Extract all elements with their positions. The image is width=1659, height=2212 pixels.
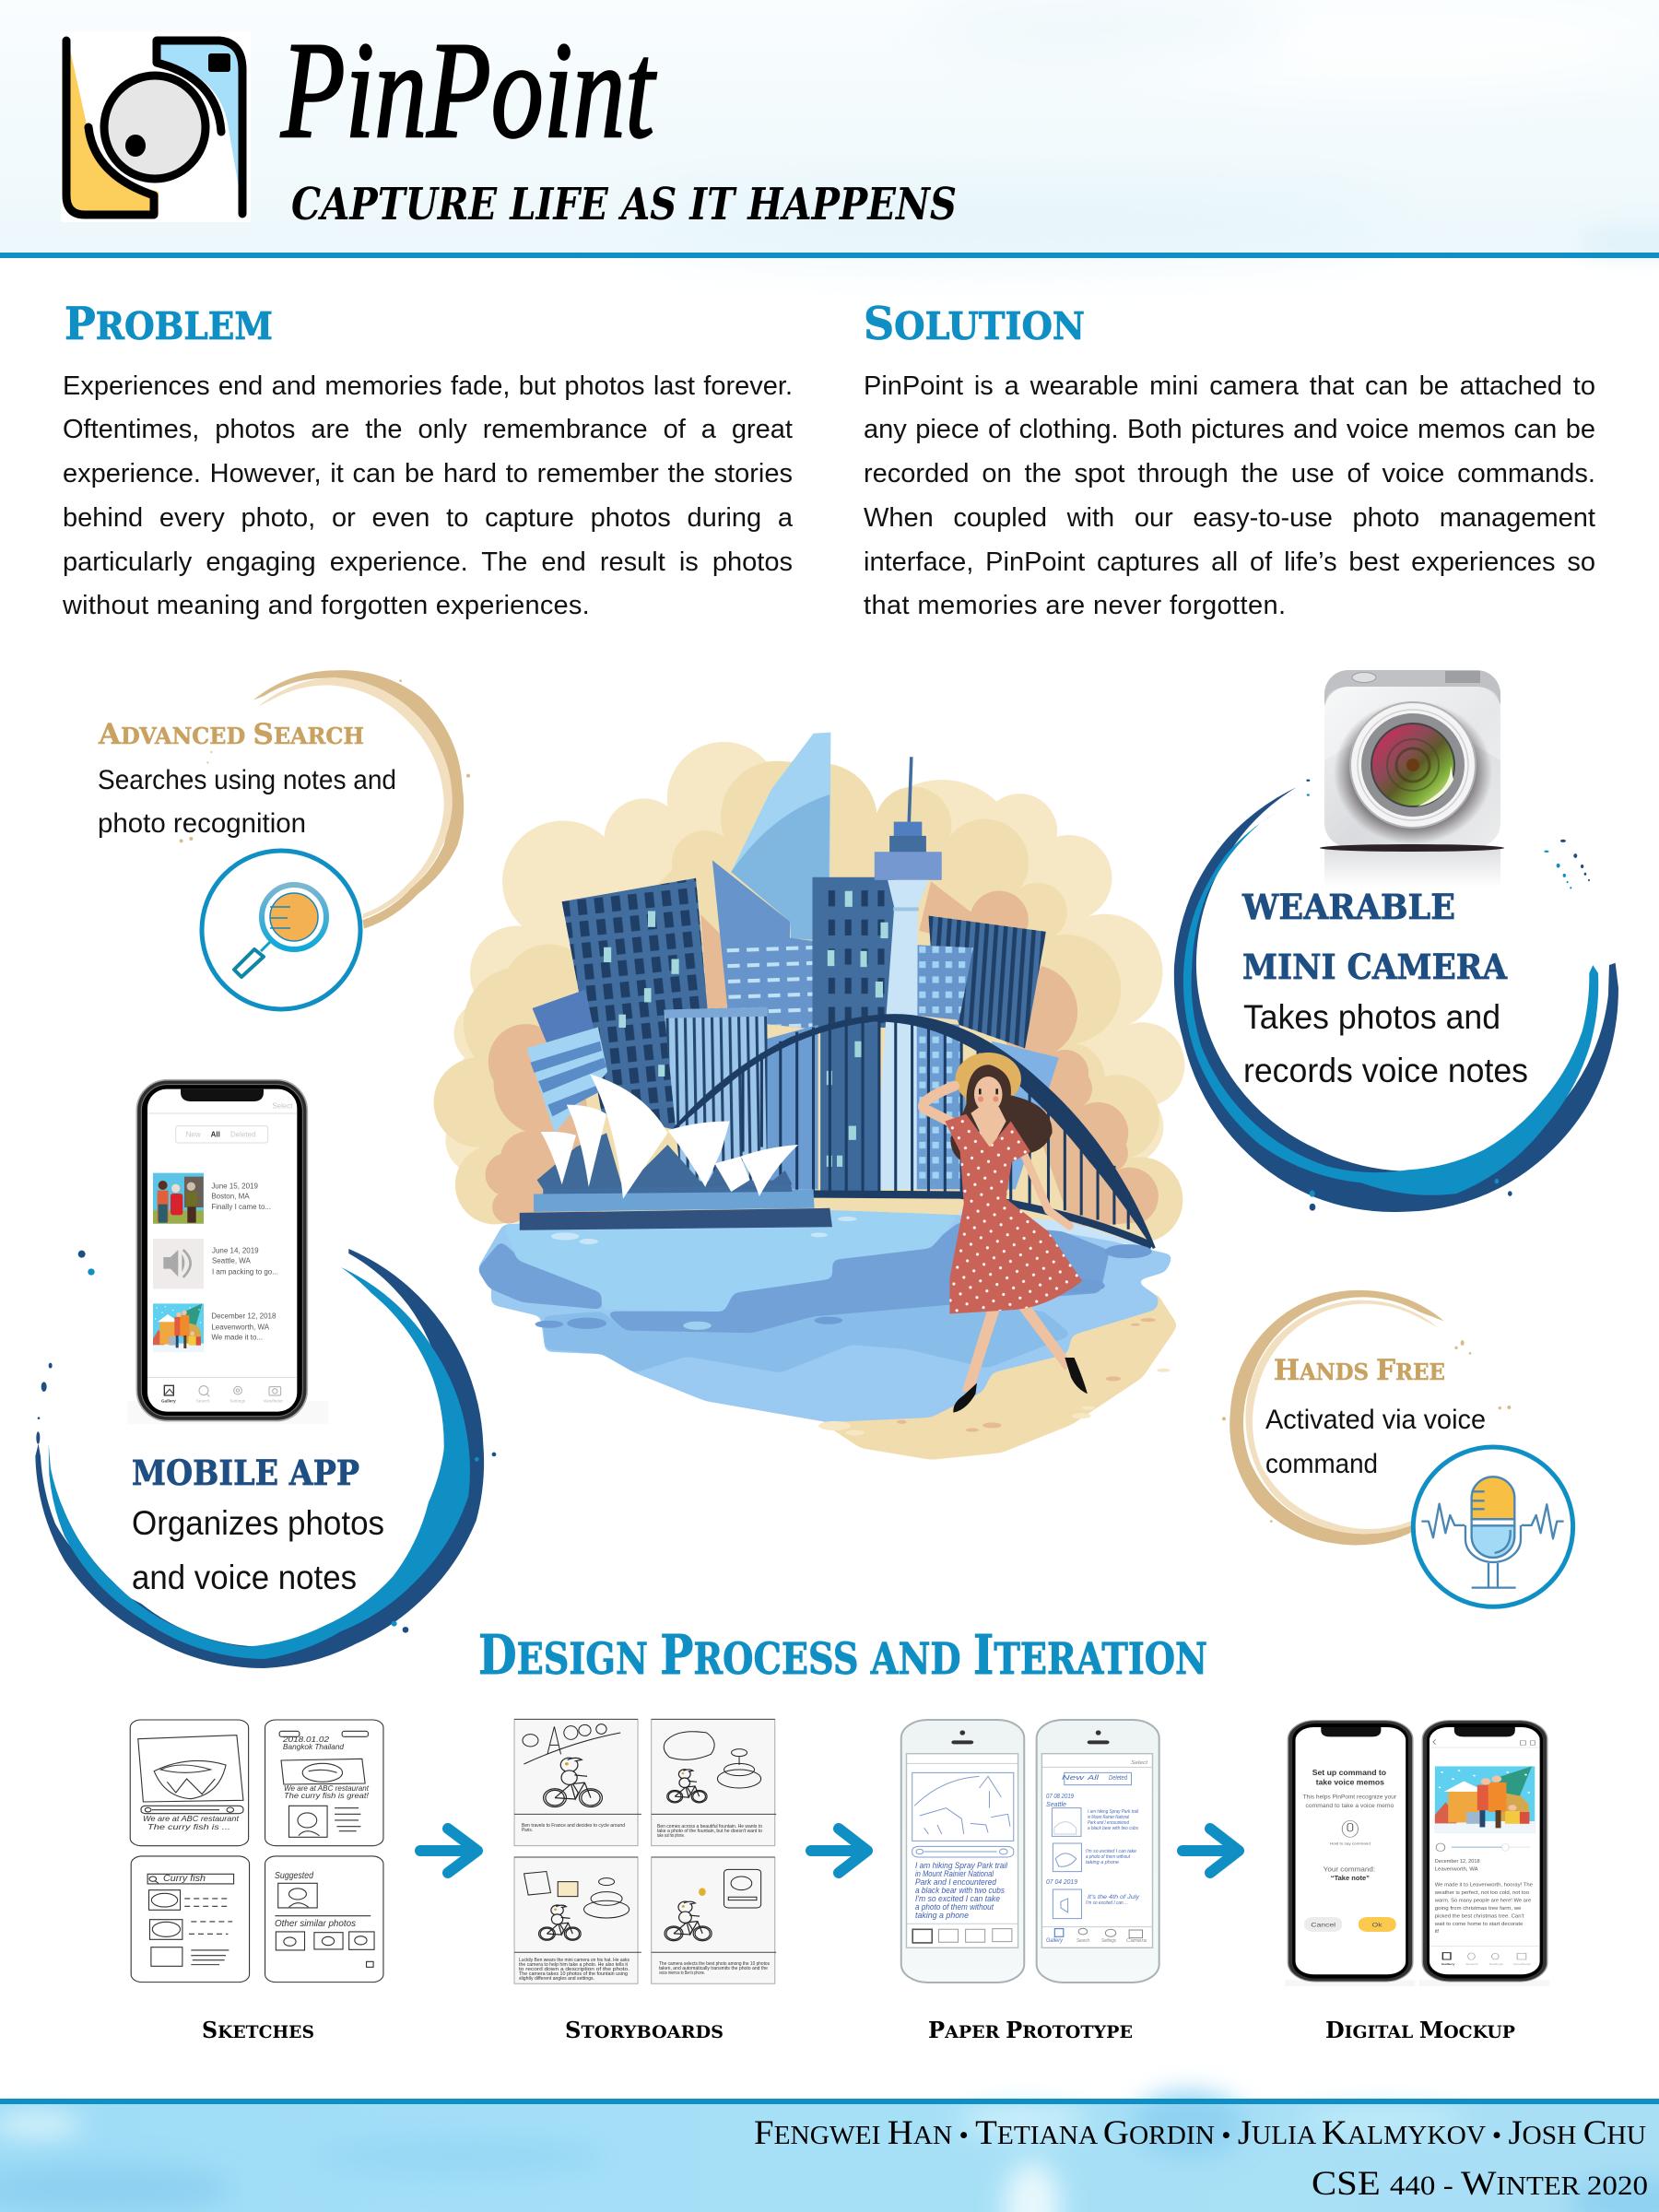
phones: Ok	[1372, 1922, 1382, 1928]
arrow	[1182, 1829, 1239, 1873]
arrow	[811, 1829, 867, 1873]
handwritten notes: Other similar photos	[275, 1919, 356, 1929]
set up command screen	[1303, 1770, 1397, 1882]
thumbnail: family photo	[153, 1173, 204, 1224]
woman in red dress	[924, 1053, 1088, 1413]
handwritten notes: Settings	[1101, 1938, 1116, 1944]
text block: problem description: particularly engaging experience. The end result is photos	[63, 547, 793, 577]
phone: gallery screen	[127, 1080, 329, 1424]
phones: December 12, 2018	[1435, 1859, 1480, 1865]
tower	[875, 757, 942, 1189]
phone: gallery screen: Search	[196, 1399, 210, 1404]
scene details	[523, 1724, 761, 1918]
header background	[0, 0, 1659, 258]
text block: problem description	[63, 371, 793, 620]
captions: Ben travels to France and decides to cycle around	[522, 1823, 625, 1829]
description	[1265, 1405, 1486, 1479]
label: DIGITAL MOCKUP	[1325, 2017, 1515, 2043]
captions: slightly different angles and settings.	[519, 1976, 594, 1982]
phones: Settings	[1489, 1963, 1503, 1966]
bridge	[675, 1016, 1154, 1248]
description: records voice notes	[1243, 1052, 1528, 1089]
paper phones	[901, 1720, 1159, 1983]
captions: Paris.	[522, 1828, 533, 1833]
handwritten notes: a black bear with two cubs	[915, 1886, 1005, 1896]
handwritten notes: The curry fish is great!	[284, 1791, 370, 1800]
arrow	[420, 1829, 477, 1873]
handwritten notes: 2018.01.02	[282, 1735, 329, 1744]
text block: solution description	[864, 371, 1595, 620]
sketch panels	[130, 1720, 383, 1983]
heading: MOBILE APP	[132, 1453, 359, 1493]
phones: going from christmas tree farm, we	[1435, 1906, 1522, 1912]
set up command screen: take voice memos	[1316, 1779, 1384, 1787]
phones: Viewfinder	[1512, 1963, 1532, 1966]
text block: problem description: Experiences end and memories fade, but photos last forever.	[63, 371, 793, 400]
set up command screen: Your command:	[1324, 1865, 1375, 1873]
description: command	[1265, 1449, 1378, 1479]
handwritten notes: in Mount Rainier National	[1088, 1815, 1130, 1820]
handwritten notes: in Mount Rainier National	[915, 1869, 994, 1879]
phones	[1285, 1721, 1549, 1986]
handwritten notes: I'm so excited I can take	[1086, 1849, 1136, 1854]
process step: Digital Mockup	[1285, 1721, 1549, 2043]
phone: gallery screen: Gallery	[161, 1399, 176, 1404]
detail screen	[1433, 1739, 1436, 1745]
set up command screen: Set up command to	[1312, 1770, 1386, 1777]
text block: problem description: behind every photo, or even to capture photos during a	[63, 503, 793, 533]
clouds behind skyline	[434, 742, 1184, 1241]
icon: microphone	[1413, 1447, 1573, 1606]
phones: warm. So many people are here! We are	[1434, 1898, 1531, 1903]
blue brush ring	[35, 1249, 496, 1668]
phone: gallery screen: Seattle, WA	[212, 1257, 252, 1265]
description	[1243, 998, 1528, 1089]
set up command screen: command to take a voice memo	[1306, 1802, 1394, 1809]
phones: it!	[1435, 1929, 1440, 1935]
description: photo recognition	[98, 808, 306, 839]
phone: gallery screen: June 14, 2019	[212, 1246, 259, 1254]
handwritten notes: New	[1062, 1773, 1085, 1782]
text block: problem description: experience. However, it can be hard to remember the stories	[63, 459, 793, 488]
description: Organizes photos	[132, 1504, 384, 1542]
set up command screen: This helps PinPoint recognize your	[1303, 1794, 1397, 1800]
phones: wait to come home to start decorate	[1434, 1922, 1524, 1927]
set up command screen: “Take note”	[1331, 1875, 1370, 1882]
Opera House	[520, 1074, 832, 1230]
handwritten notes: Bangkok Thailand	[283, 1742, 344, 1751]
captions: Ben comes across a beautiful fountain. He wants to	[657, 1824, 762, 1830]
handwritten notes: I am hiking Spray Park trail	[1088, 1809, 1139, 1815]
process step: Storyboards	[514, 1719, 776, 2043]
phone: gallery screen: Viewfinder	[263, 1399, 283, 1404]
set up command screen: Hold to say command	[1330, 1841, 1371, 1845]
process step: Sketches	[130, 1720, 383, 2043]
phone: gallery screen: New	[186, 1131, 201, 1139]
captions: voice memos to Ben's phone.	[659, 1971, 705, 1976]
heading: ADVANCED SEARCH	[98, 718, 364, 751]
heading: HANDS FREE	[1274, 1354, 1445, 1387]
handwritten notes: All	[1087, 1773, 1099, 1782]
phones: Search	[1465, 1963, 1478, 1966]
text block: solution description: When coupled with our easy-to-use photo management	[864, 503, 1595, 533]
phones: We made it to Leavenworth, hooray! The	[1435, 1883, 1533, 1888]
phone: gallery screen: Select	[272, 1102, 293, 1111]
description: Activated via voice	[1265, 1405, 1486, 1435]
captions: The camera takes 10 photos of the fountain using	[519, 1971, 628, 1977]
text block: problem description: Oftentimes, photos are the only remembrance of a great	[63, 415, 793, 444]
phone: gallery screen: Deleted	[230, 1131, 256, 1139]
captions: take a photo of the fountain, but he doesn't want to	[657, 1829, 762, 1834]
phone: gallery screen: December 12, 2018	[211, 1312, 276, 1321]
handwritten notes: taking a phone	[1086, 1860, 1119, 1865]
handwritten notes: We are at ABC restaurant	[284, 1783, 370, 1793]
coffee ring	[180, 670, 470, 929]
panel: Mobile App	[35, 1080, 496, 1668]
phones: picked the best christmas tree. Can't	[1435, 1913, 1524, 1919]
captions: take out his phone.	[657, 1833, 685, 1839]
label: PAPER PROTOTYPE	[928, 2017, 1133, 2043]
handwritten notes: taking a phone	[915, 1911, 969, 1921]
heading	[1241, 887, 1508, 987]
icon: PinPoint logo	[61, 32, 251, 222]
description	[98, 765, 396, 839]
text block: solution description: interface, PinPoint captures all of life’s best experiences so	[864, 547, 1595, 577]
handwritten notes: The curry fish is ...	[147, 1822, 230, 1831]
coffee ring	[1222, 1290, 1511, 1545]
label: STORYBOARDS	[565, 2017, 724, 2043]
panel: Advanced Search	[98, 670, 470, 1009]
handwritten notes: Seattle	[1046, 1800, 1066, 1808]
phone: gallery screen: We made it to...	[211, 1333, 263, 1341]
handwritten notes: a photo of them without	[1086, 1854, 1131, 1860]
tagline: CAPTURE LIFE AS IT HAPPENS	[291, 179, 957, 230]
process step: Paper Prototype	[901, 1720, 1159, 2043]
phone: gallery screen: I am packing to go...	[212, 1268, 278, 1277]
heading: Design Process and Iteration: DESIGN PROCESS AND ITERATION	[478, 1623, 1207, 1687]
icon: magnifier	[202, 851, 360, 1009]
captions: The camera selects the best photo among the 10 photos	[659, 1961, 770, 1967]
footer background	[0, 2092, 1659, 2212]
phone: gallery screen: June 15, 2019	[211, 1182, 258, 1190]
handwritten notes: 07 04 2019	[1046, 1877, 1078, 1886]
phones: Leavenworth, WA	[1435, 1867, 1478, 1872]
handwritten notes: Camera	[1126, 1938, 1147, 1944]
handwritten notes: Suggested	[275, 1871, 313, 1881]
handwritten notes: We are at ABC restaurant	[143, 1814, 240, 1823]
captions: Luckily Ben wears the mini camera on his hat. He asks	[519, 1958, 629, 1963]
phones: Gallery	[1441, 1963, 1456, 1966]
handwritten notes	[143, 1735, 370, 1929]
handwritten notes: Park and I encountered	[1088, 1820, 1129, 1826]
handwritten notes: Gallery	[1046, 1938, 1064, 1944]
handwritten notes: It's the 4th of July	[1088, 1895, 1140, 1900]
handwritten notes: a black bear with two cubs	[1088, 1826, 1138, 1831]
description: Searches using notes and	[98, 765, 396, 795]
handwritten notes: Select	[1131, 1760, 1148, 1766]
label: SKETCHES	[202, 2017, 314, 2043]
phone: gallery screen: Boston, MA	[211, 1193, 250, 1201]
handwritten notes: I'm so excited I can take	[915, 1894, 1000, 1904]
skyline buildings	[526, 733, 1059, 1192]
handwritten notes: Deleted	[1109, 1773, 1128, 1782]
storyboard frames	[514, 1719, 776, 1983]
phones: weather is perfect, not too cold, not too	[1434, 1890, 1529, 1896]
handwritten notes: Park and I encountered	[915, 1877, 997, 1888]
course line: CSE 440 - WINTER 2020	[1312, 2165, 1648, 2203]
description: and voice notes	[132, 1559, 357, 1596]
heading: Solution: SOLUTION	[864, 297, 1085, 350]
team names: FENGWEI HAN • TETIANA GORDIN • JULIA KALMYKOV • JOSH CHU	[754, 2114, 1646, 2152]
phone: gallery screen: Settings	[229, 1399, 246, 1404]
handwritten notes: 07 08 2019	[1046, 1792, 1075, 1800]
water and sand	[477, 1210, 1178, 1460]
panel: Wearable Mini Camera	[1174, 670, 1618, 1212]
handwritten notes: a photo of them without	[915, 1902, 994, 1912]
captions: the camera to help him take a photo. He also tells it	[519, 1962, 628, 1968]
phone: gallery screen: Finally I came to...	[211, 1203, 271, 1211]
description: Takes photos and	[1243, 998, 1500, 1036]
heading: Problem: PROBLEM	[65, 297, 273, 350]
handwritten notes: Curry fish	[163, 1874, 206, 1884]
captions: taken, and automatically transmits the photo and the	[659, 1966, 768, 1971]
icon: camera	[1320, 670, 1504, 888]
text block: solution description: that memories are never forgotten.	[864, 591, 1286, 620]
blue brush ring	[1174, 780, 1618, 1212]
text block: problem description: without meaning and forgotten experiences.	[63, 591, 590, 620]
heading: WEARABLE	[1241, 887, 1455, 927]
text block: solution description: PinPoint is a wearable mini camera that can be attached to	[864, 371, 1595, 400]
handwritten notes: I am hiking Spray Park trail	[915, 1861, 1008, 1871]
panel: Hands Free	[1222, 1290, 1573, 1606]
captions: to record down a description of the photo.	[519, 1967, 630, 1972]
text block: solution description: recorded on the spot through the use of voice commands.	[864, 459, 1595, 488]
handwritten notes: I'm so excited I can ...	[1086, 1900, 1128, 1906]
title: PinPoint: PinPoint	[280, 14, 657, 167]
heading: MINI CAMERA	[1242, 947, 1508, 987]
handwritten notes: Search	[1077, 1938, 1089, 1944]
thumbnail: winter scene	[153, 1303, 204, 1352]
phone: gallery screen: All	[211, 1131, 220, 1139]
central illustration: Sydney skyline with woman	[434, 733, 1184, 1460]
tab bar icons	[164, 1385, 281, 1396]
captions	[519, 1823, 770, 1982]
phones: Cancel	[1311, 1922, 1335, 1928]
text block: solution description: any piece of clothing. Both pictures and voice memos can be	[864, 415, 1595, 444]
handwritten notes	[915, 1760, 1148, 1944]
description	[132, 1504, 384, 1596]
phone: gallery screen: Leavenworth, WA	[211, 1323, 270, 1331]
icon: speaker	[163, 1250, 191, 1277]
